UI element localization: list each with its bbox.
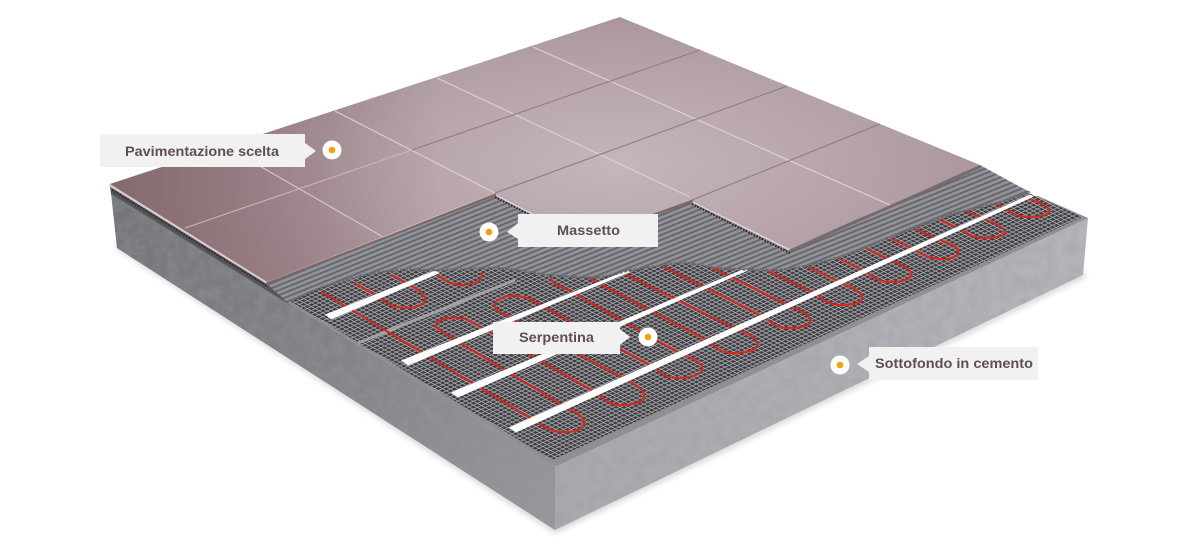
callout: Serpentina: Serpentina — [519, 329, 594, 345]
massetto: ribbed screed layer — [110, 165, 1030, 303]
concrete slab: sottofondo in cemento — [111, 193, 1088, 534]
callout: Sottofondo in cemento — [830, 347, 1038, 380]
scalloped front edge — [290, 192, 1030, 301]
callout: Massetto — [480, 214, 658, 247]
tile teeth shadows — [112, 190, 790, 286]
screed side under tile edge — [110, 186, 290, 303]
mesh seam — [358, 280, 515, 343]
tile left shading — [110, 17, 980, 282]
callout: Sottofondo in cemento: Sottofondo in cemento — [875, 355, 1033, 371]
tile joints — [185, 47, 890, 237]
tile surface — [110, 17, 980, 282]
red heating cable serpentine — [322, 190, 1049, 432]
callout: Pavimentazione scelta: Pavimentazione scelta — [125, 143, 279, 159]
callout: Serpentina — [493, 322, 658, 354]
pavimentazione: ceramic tiles — [110, 17, 980, 286]
callout: Massetto: Massetto — [557, 222, 620, 238]
callout: Pavimentazione scelta — [100, 134, 342, 167]
mesh layer with heating cable — [290, 186, 1082, 460]
white spacer strips — [325, 194, 1034, 432]
wire mesh — [290, 186, 1082, 460]
tile edges — [110, 167, 980, 284]
